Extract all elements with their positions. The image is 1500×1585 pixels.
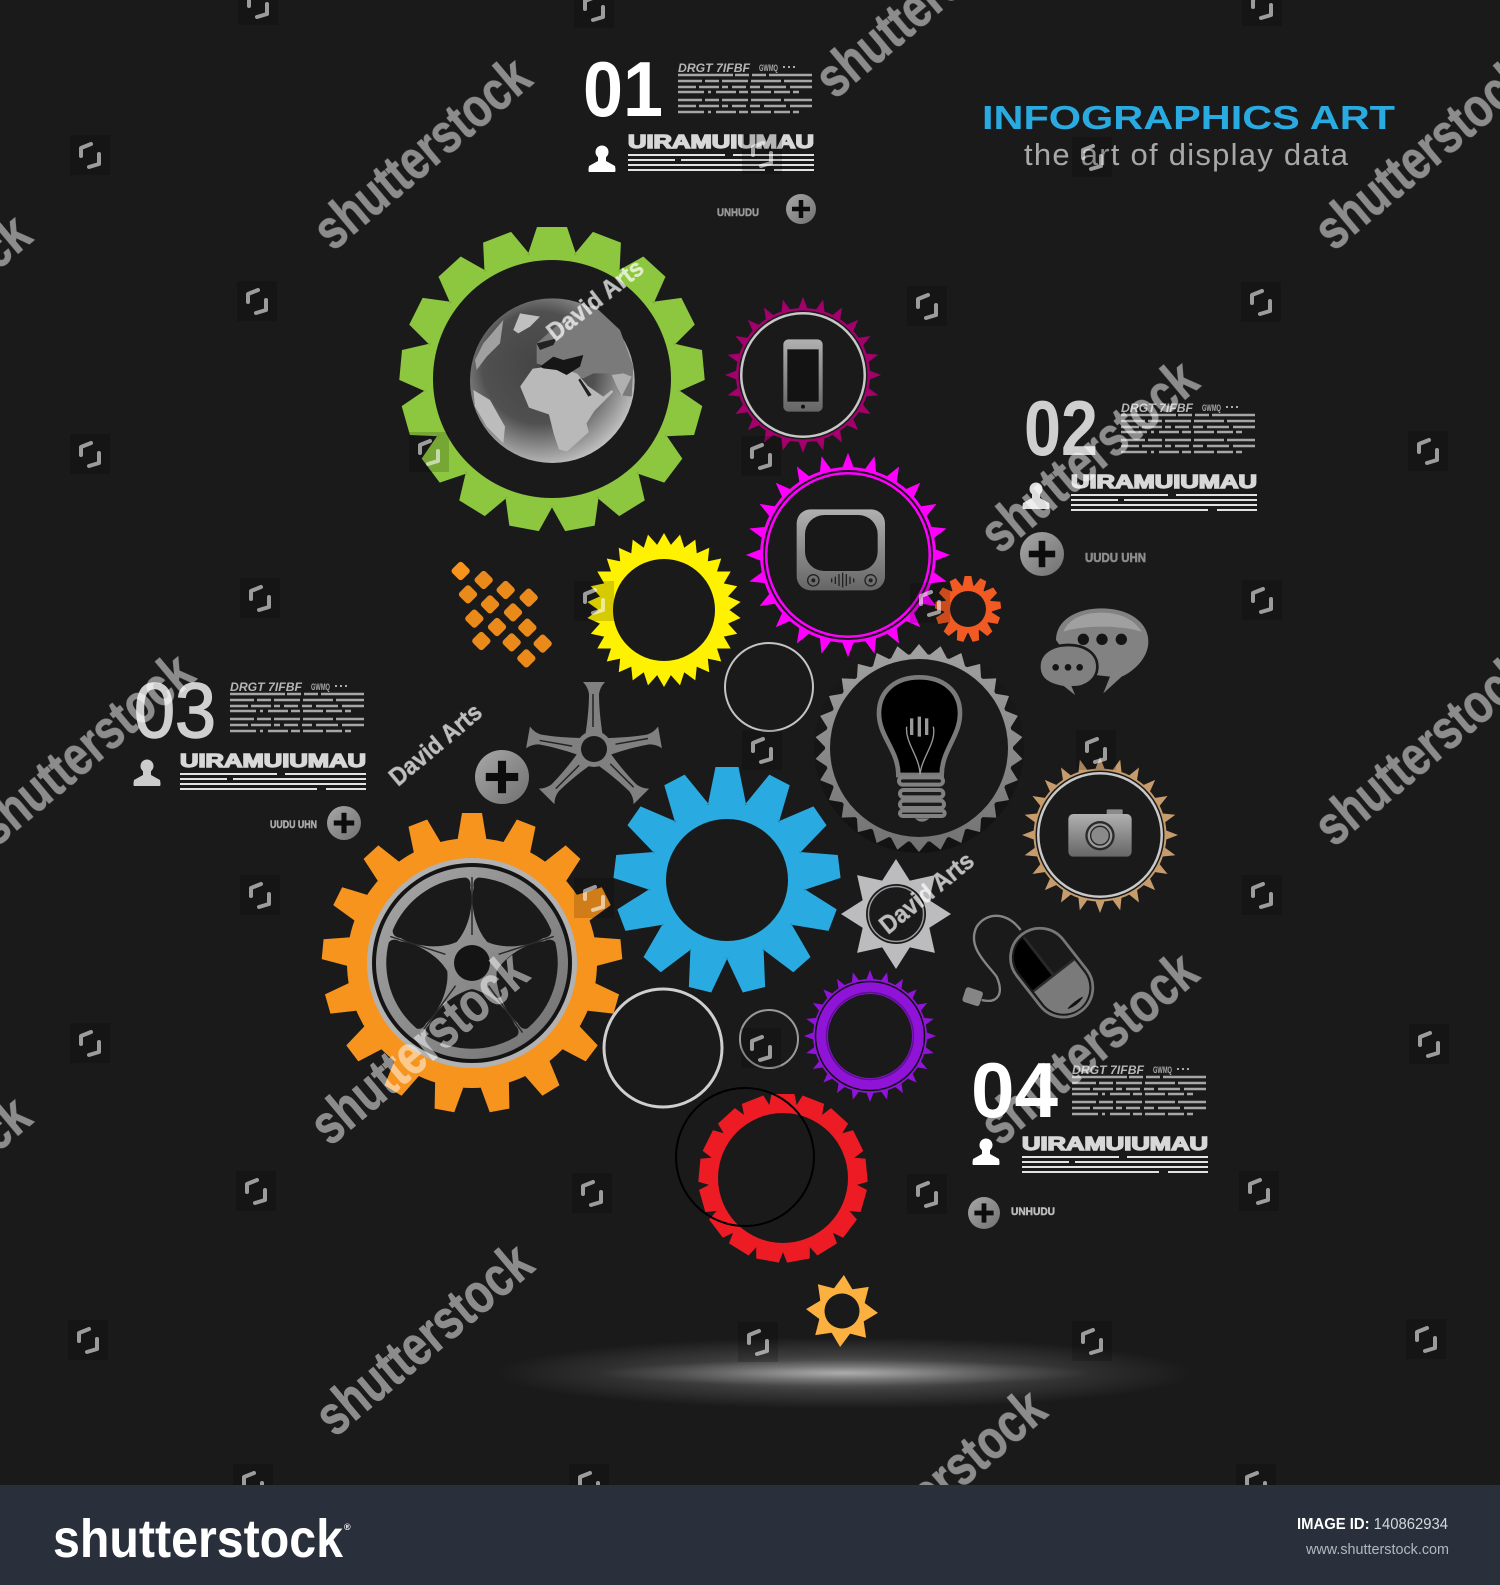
watermark: David Arts: David Arts — [874, 847, 980, 940]
footer logo: shutterstock — [53, 1509, 344, 1569]
gear: green with globe — [398, 227, 706, 533]
gear: bulb — [787, 623, 1051, 873]
footer url: www.shutterstock.com — [1305, 1541, 1449, 1558]
icon: phone — [783, 339, 823, 412]
section 01 — [583, 45, 816, 224]
icon: person 04 — [972, 1138, 1000, 1165]
floor glow — [494, 1337, 1194, 1409]
watermark text: shutterstock — [297, 938, 540, 1156]
number 01: 01 — [583, 45, 663, 133]
gear: grey star — [841, 859, 951, 969]
title: INFOGRAPHICS ART — [982, 99, 1395, 136]
text block 02 — [1071, 401, 1257, 510]
gear: orange with wheel — [321, 813, 623, 1113]
gear: magenta with TV — [746, 453, 950, 657]
subtitle: the art of display data — [1024, 137, 1349, 172]
icon: plus 02 — [1020, 532, 1064, 576]
icon: camera — [1068, 809, 1132, 857]
icon: plus 01 — [786, 194, 816, 224]
watermark: David Arts — [384, 254, 980, 940]
number 04: 04 — [971, 1046, 1058, 1134]
icon: person 02 — [1022, 482, 1050, 509]
watermark: David Arts: David Arts — [541, 254, 649, 347]
text block 03 — [180, 680, 366, 789]
circle outline: small lower — [740, 1010, 798, 1068]
gear: camera — [1022, 757, 1178, 913]
icon: person 01 — [588, 146, 616, 172]
icon: light bulb — [879, 677, 960, 822]
number 03: 03 — [134, 666, 216, 754]
label 04: UNHUDU — [1011, 1206, 1055, 1218]
footer registered mark: ® — [344, 1522, 351, 1532]
icon: plus 04 — [968, 1197, 1000, 1229]
icon: plus 03 — [327, 806, 361, 840]
gear: small orange-red — [935, 576, 1001, 642]
section 03 — [134, 666, 529, 840]
gear: phone — [725, 297, 881, 453]
text block 01 — [628, 61, 814, 170]
watermark text: shutterstock — [302, 1229, 545, 1447]
label 02: UUDU UHN — [1085, 550, 1146, 565]
footer bar — [0, 1485, 1500, 1585]
icon: globe — [470, 298, 635, 463]
icon: TV — [797, 509, 885, 590]
watermark text: shutterstock — [967, 938, 1210, 1156]
footer image id: IMAGE ID: 140862934 — [1297, 1516, 1448, 1533]
icon: plus large — [475, 750, 529, 804]
section 04 — [968, 1046, 1208, 1229]
icon: wheel — [367, 858, 577, 1068]
gear: blue — [613, 767, 841, 994]
icon: spoked star — [526, 682, 662, 804]
circle outline: large lower — [604, 989, 722, 1107]
watermark text: shutterstock — [300, 43, 543, 261]
circle outline: black over red gear — [676, 1088, 814, 1226]
label 03: UUDU UHN — [270, 819, 317, 831]
circle outline: upper — [725, 643, 813, 731]
gear: small gold star — [804, 1273, 880, 1349]
gear: yellow — [566, 518, 762, 702]
pattern: orange diamonds — [450, 561, 553, 669]
number 02: 02 — [1024, 384, 1098, 472]
watermark text: shutterstock — [967, 346, 1210, 564]
icon: person 03 — [134, 760, 160, 786]
text block 04 — [1022, 1063, 1208, 1172]
icon: speech bubbles — [1039, 608, 1148, 699]
watermark: David Arts: David Arts — [384, 698, 488, 792]
gear: purple — [804, 970, 936, 1102]
gear: red — [698, 1094, 868, 1263]
section 02 — [1020, 384, 1257, 576]
label 01: UNHUDU — [717, 207, 759, 219]
icon: mouse — [962, 916, 1105, 1029]
